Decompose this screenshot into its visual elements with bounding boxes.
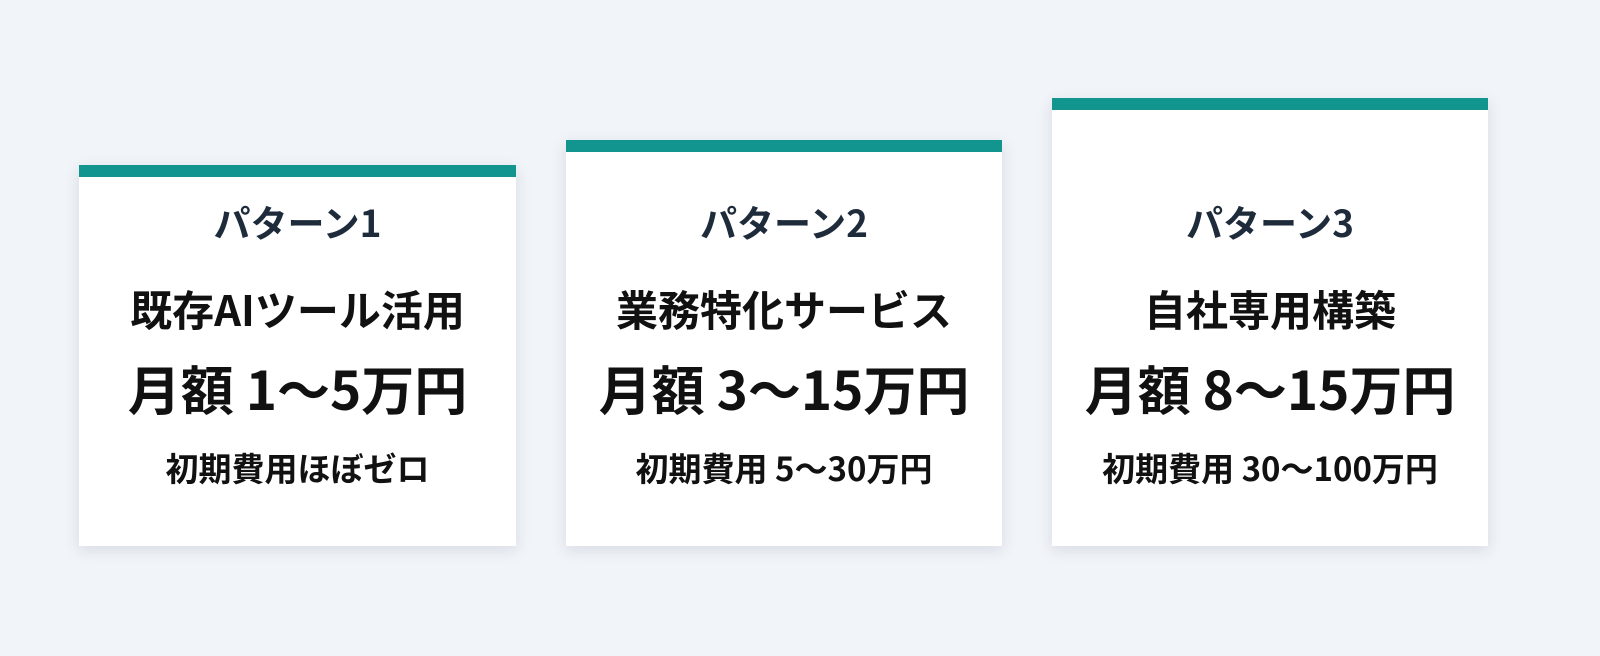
text: initial cost 3: 初期費用 30〜100万円 [1102,443,1438,491]
text: price 2: 月額 3〜15万円 [599,350,969,426]
heading: pattern 3: パターン3 [1186,194,1354,248]
text: name 3: 自社専用構築 [1144,278,1396,339]
heading: pattern 2: パターン2 [700,194,868,248]
panel: pattern 2 [566,140,1002,546]
text: price 1: 月額 1〜5万円 [128,350,467,426]
text: initial cost 2: 初期費用 5〜30万円 [636,443,932,491]
text: name 1: 既存AIツール活用 [130,278,465,339]
text: name 2: 業務特化サービス [616,278,952,339]
panel: pattern 1 [79,165,516,546]
heading: pattern 1: パターン1 [214,194,381,248]
panel: pattern 3 [1052,98,1488,546]
text: initial cost 1: 初期費用ほぼゼロ [166,443,430,491]
text: price 3: 月額 8〜15万円 [1085,350,1455,426]
